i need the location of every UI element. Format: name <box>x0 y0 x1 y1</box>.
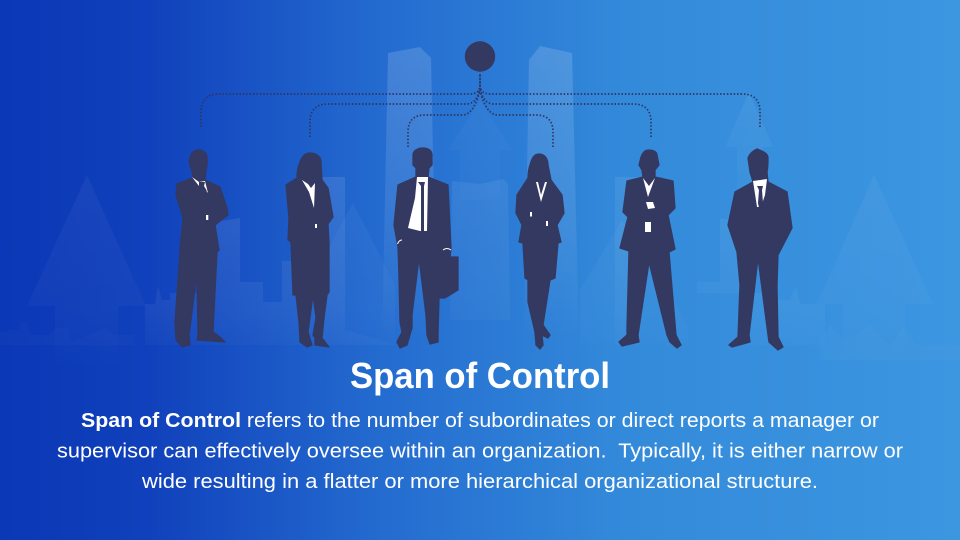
person 4: woman with folded arms <box>516 154 564 349</box>
far skyline <box>0 322 960 360</box>
description: Span of Control refers to the number of subordinates or direct reports a manager or <box>81 410 879 432</box>
title: Span of Control <box>350 355 610 396</box>
description: supervisor can effectively oversee within an organization. Typically, it is either narrow or <box>57 440 903 462</box>
person 1: man with folded arms <box>175 150 228 347</box>
description <box>57 410 903 493</box>
background city skyline <box>0 46 960 400</box>
left tall tower <box>382 47 437 340</box>
person 2: woman thinking <box>286 153 333 347</box>
person 3: man with briefcase <box>394 148 458 348</box>
centre buildings <box>450 179 510 320</box>
top right arrow <box>725 92 773 240</box>
person 5: man with crossed arms <box>619 150 681 348</box>
right tall tower <box>524 46 579 340</box>
mid triangles <box>322 203 395 345</box>
left stepped buildings <box>145 177 395 345</box>
person 6: man with hands in pockets <box>728 149 792 350</box>
left faded arrow <box>27 175 146 400</box>
dotted connector lines <box>201 74 760 147</box>
description: wide resulting in a flatter or more hierarchical organizational structure. <box>141 471 818 493</box>
centre arrow <box>448 100 512 200</box>
manager node <box>465 41 495 72</box>
right faded arrow <box>817 175 933 400</box>
right stepped buildings <box>615 177 825 345</box>
